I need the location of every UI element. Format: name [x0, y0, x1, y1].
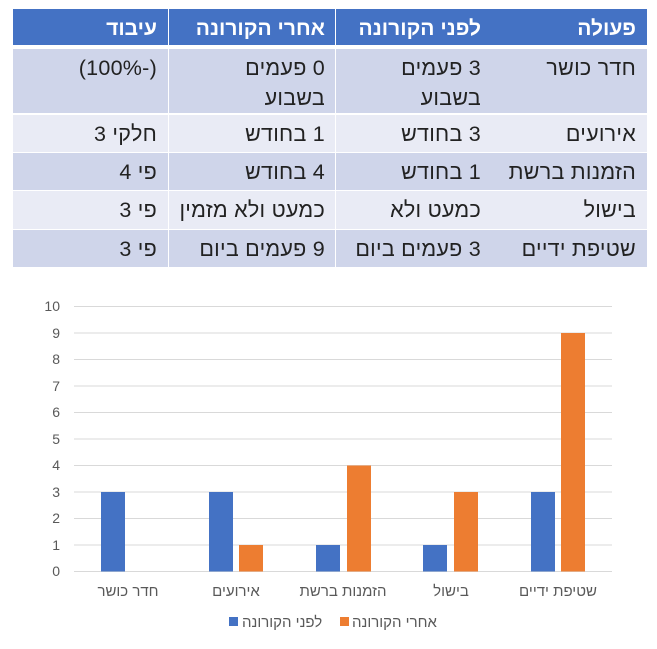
row 2 before [336, 115, 491, 152]
row 2 change [13, 115, 168, 152]
header: after corona: אחרי הקורונה [196, 17, 325, 40]
row 2 change: חלקי 3 [94, 122, 157, 146]
y axis labels: 7 [52, 378, 60, 394]
row 1 after [169, 49, 335, 113]
legend: אחרי הקורונה [352, 614, 437, 631]
category labels: חדר כושר [97, 583, 159, 600]
row 1 before [336, 49, 491, 113]
comparison table [13, 9, 647, 267]
row 5 after: 9 פעמים ביום [199, 237, 325, 261]
y axis labels: 6 [52, 404, 60, 420]
y axis labels: 2 [52, 510, 60, 526]
header: action: פעולה [577, 17, 636, 40]
row 3 action: הזמנות ברשת [509, 160, 636, 184]
row 1 change: (-100%) [79, 56, 157, 80]
row 4 action: בישול [584, 198, 636, 222]
row 2 before: 3 בחודש [401, 122, 481, 146]
category labels [97, 583, 597, 600]
y axis labels: 3 [52, 484, 60, 500]
y axis labels [44, 298, 60, 579]
header: after corona [169, 9, 335, 45]
category labels: הזמנות ברשת [300, 583, 386, 600]
row 4 change: פי 3 [119, 198, 157, 222]
row 2 after: 1 בחודש [245, 122, 325, 146]
row 3 after [169, 153, 335, 190]
bars: after corona [239, 333, 585, 572]
bars: before corona [101, 492, 555, 572]
row 5 before [336, 230, 491, 267]
row 3 change: פי 4 [119, 160, 157, 184]
row 4 before [336, 191, 491, 229]
category labels: בישול [433, 583, 469, 600]
category labels: שטיפת ידיים [519, 583, 597, 600]
row 4 action [491, 191, 647, 229]
y axis labels: 4 [52, 457, 60, 473]
row 1 change [13, 49, 168, 113]
row 4 after [169, 191, 335, 229]
row 5 action: שטיפת ידיים [522, 237, 636, 261]
row 5 before: 3 פעמים ביום [355, 237, 481, 261]
header: action [491, 9, 647, 45]
row 3 after: 4 בחודש [245, 160, 325, 184]
y axis labels: 9 [52, 325, 60, 341]
row 1 action [491, 49, 647, 113]
bar chart [44, 298, 612, 631]
row 2 after [169, 115, 335, 152]
row 2 action [491, 115, 647, 152]
row 3 change [13, 153, 168, 190]
header: before corona: לפני הקורונה [359, 17, 481, 40]
header: before corona [336, 9, 491, 45]
y axis labels: 0 [52, 563, 60, 579]
y axis labels: 5 [52, 431, 60, 447]
category labels: אירועים [212, 583, 260, 600]
header: multiplier [13, 9, 168, 45]
row 5 after [169, 230, 335, 267]
row 1 after: 0 פעמים בשבוע [245, 56, 325, 110]
row 2 action: אירועים [566, 122, 636, 146]
row 3 action [491, 153, 647, 190]
legend: לפני הקורונה [242, 614, 322, 631]
row 3 before [336, 153, 491, 190]
header: multiplier: עיבוד [106, 17, 157, 40]
y axis labels: 10 [44, 298, 60, 314]
row 1 before: 3 פעמים בשבוע [401, 56, 481, 110]
row 4 after: כמעט ולא מזמין [179, 198, 325, 222]
row 4 before: כמעט ולא [390, 198, 481, 222]
y axis labels: 1 [52, 537, 60, 553]
row 5 change: פי 3 [119, 237, 157, 261]
row 1 action: חדר כושר [546, 56, 636, 80]
y axis labels: 8 [52, 351, 60, 367]
row 5 action [491, 230, 647, 267]
legend [229, 614, 437, 631]
row 5 change [13, 230, 168, 267]
row 3 before: 1 בחודש [401, 160, 481, 184]
row 4 change [13, 191, 168, 229]
